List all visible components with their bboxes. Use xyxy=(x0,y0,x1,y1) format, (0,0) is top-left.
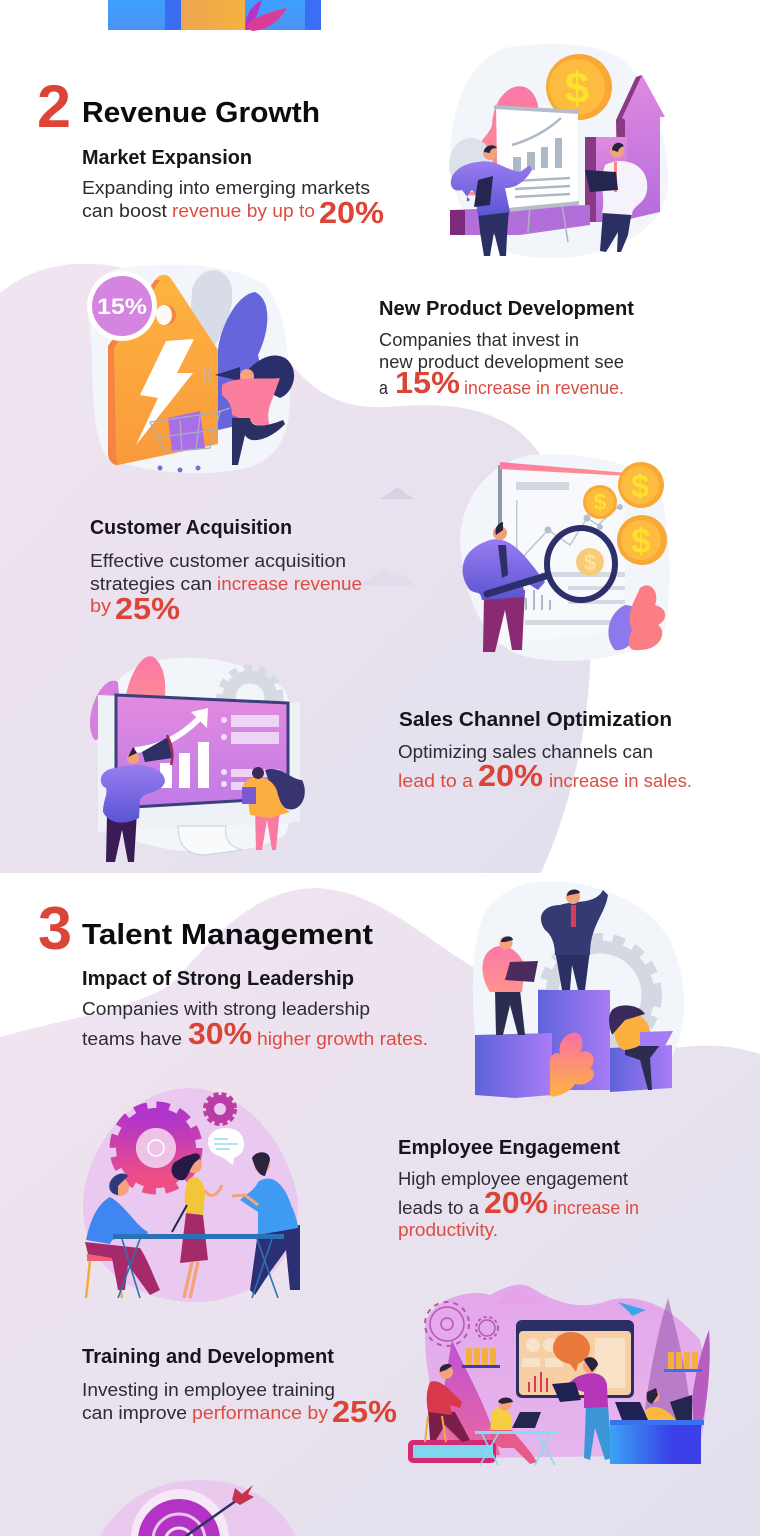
illustration: magnifier with coins: $ xyxy=(594,489,607,515)
text block: Employee Engagement: Employee Engagement xyxy=(398,1137,620,1159)
text block: Market Expansion xyxy=(82,147,384,230)
text block: New Product Development: a xyxy=(379,378,389,398)
text block: Employee Engagement: productivity. xyxy=(398,1220,498,1240)
text block: Customer Acquisition xyxy=(90,517,362,626)
text block: Customer Acquisition: increase revenue xyxy=(217,574,362,594)
illustration: magnifier with coins: $ xyxy=(631,522,651,561)
background blob: talent section xyxy=(0,888,760,1536)
illustration: presentation with coin and growth arrow: $ xyxy=(565,64,589,113)
background blob: revenue section xyxy=(0,264,590,873)
illustration: magnifier with coins: $ xyxy=(584,550,596,575)
text block: New Product Development: increase in revenue. xyxy=(464,378,624,398)
text block: Sales Channel Optimization: 20% xyxy=(478,758,543,793)
text block: New Product Development: Companies that invest in xyxy=(379,330,579,350)
text block: Market Expansion: Market Expansion xyxy=(82,147,252,169)
illustration: target with arrow (cropped at bottom) xyxy=(100,1480,296,1536)
text block: Training and Development: 25% xyxy=(332,1394,397,1429)
text block: Market Expansion: can boost xyxy=(82,201,167,221)
text block: Sales Channel Optimization: Optimizing sales channels can xyxy=(398,742,653,762)
text block: Customer Acquisition: Customer Acquisition xyxy=(90,517,292,539)
text block: Training and Development: performance by xyxy=(192,1403,328,1423)
text block: Sales Channel Optimization: increase in sales. xyxy=(549,771,692,791)
illustration: price tag with megaphone woman xyxy=(87,265,294,473)
illustration: team meeting at table xyxy=(83,1088,300,1302)
text block: Training and Development: can improve xyxy=(82,1403,187,1423)
text block: Customer Acquisition: strategies can xyxy=(90,574,212,594)
illustration: monitor with growth chart xyxy=(90,656,305,862)
illustration: cropped top bar from previous section xyxy=(108,0,321,31)
text block: Customer Acquisition: Effective customer acquisition xyxy=(90,551,346,571)
number 2: 2 xyxy=(37,73,71,140)
text block: Customer Acquisition: 25% xyxy=(115,591,180,626)
text block: Impact of Strong Leadership: Companies with strong leadership xyxy=(82,999,370,1019)
text block: Market Expansion: revenue by up to xyxy=(172,201,315,221)
text block: New Product Development: 15% xyxy=(395,365,460,400)
background clouds xyxy=(360,488,416,585)
text block: Employee Engagement: High employee engagement xyxy=(398,1169,628,1189)
illustration: magnifier with coins xyxy=(460,454,670,661)
text block: Sales Channel Optimization xyxy=(398,709,692,793)
text block: Employee Engagement: 20% xyxy=(484,1185,548,1220)
text block: Training and Development xyxy=(82,1346,397,1429)
heading: Revenue Growth: Revenue Growth xyxy=(82,97,320,129)
text block: Employee Engagement: increase in xyxy=(553,1198,639,1218)
text block: Market Expansion: 20% xyxy=(319,195,384,230)
illustration: presentation with coin and growth arrow xyxy=(449,44,668,258)
text block: New Product Development: new product development see xyxy=(379,352,624,372)
illustration: price tag with megaphone woman: 15% xyxy=(97,294,147,319)
text block: Market Expansion: Expanding into emerging markets xyxy=(82,178,370,198)
text block: Impact of Strong Leadership: higher growth rates. xyxy=(257,1029,428,1049)
text block: New Product Development xyxy=(379,298,634,400)
text block: Sales Channel Optimization: Sales Channel Optimization xyxy=(399,709,672,731)
text block: Impact of Strong Leadership: Impact of Strong Leadership xyxy=(82,968,354,990)
text block: Impact of Strong Leadership xyxy=(82,968,428,1051)
illustration: magnifier with coins: $ xyxy=(631,468,649,504)
text block: Customer Acquisition: by xyxy=(90,596,111,616)
text block: Training and Development: Investing in employee training xyxy=(82,1380,335,1400)
heading: Talent Management: Talent Management xyxy=(82,919,373,951)
number 3: 3 xyxy=(38,895,72,962)
illustration: leader on podium with gear xyxy=(473,882,684,1098)
text block: Impact of Strong Leadership: teams have xyxy=(82,1029,182,1049)
text block: Training and Development: Training and Development xyxy=(82,1346,334,1368)
text block: Employee Engagement: leads to a xyxy=(398,1198,480,1218)
illustration: training office xyxy=(408,1285,710,1465)
text block: New Product Development: New Product Development xyxy=(379,298,634,320)
text block: Sales Channel Optimization: lead to a xyxy=(398,771,474,791)
text block: Employee Engagement xyxy=(398,1137,639,1240)
text block: Impact of Strong Leadership: 30% xyxy=(188,1016,252,1051)
